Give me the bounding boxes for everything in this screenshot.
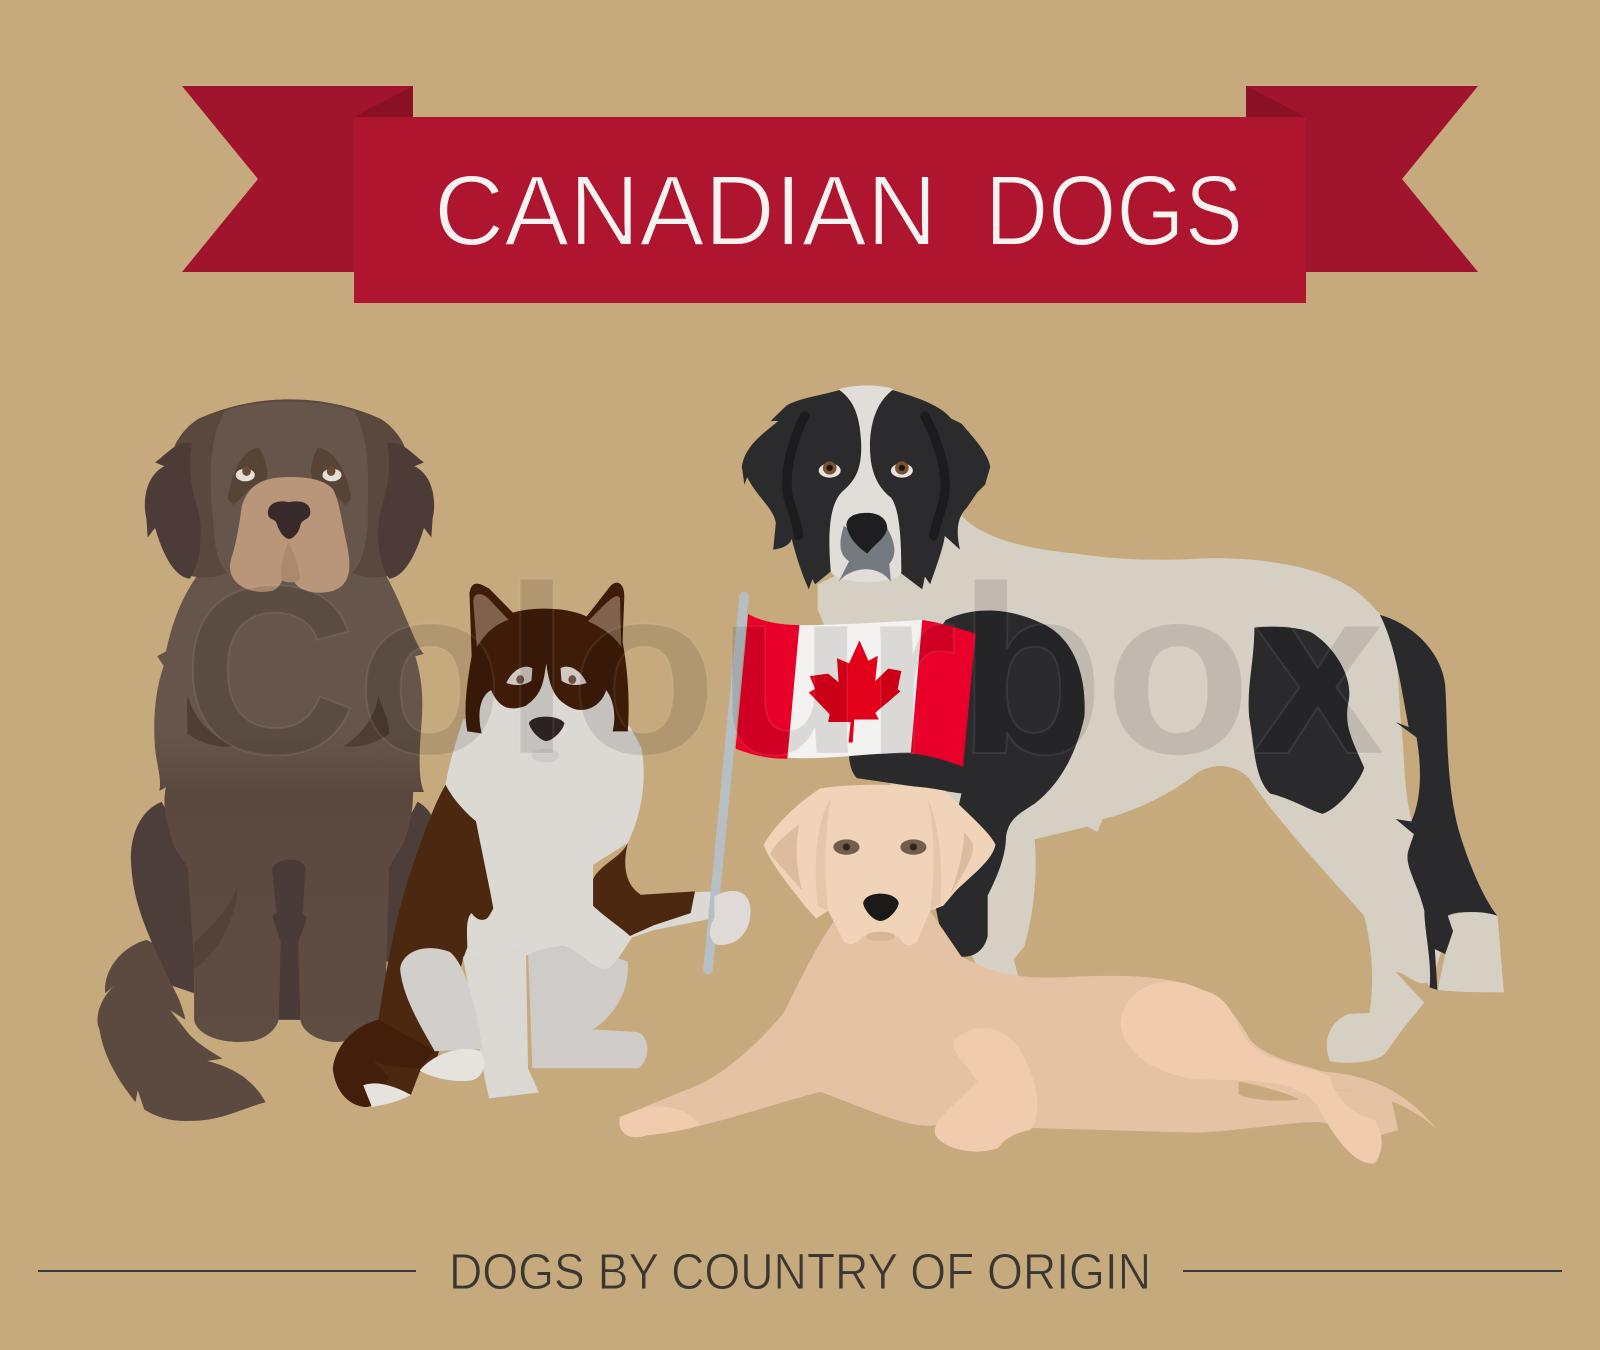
dog: yellow Labrador lying <box>619 785 1437 1164</box>
ribbon banner with title <box>182 86 1478 303</box>
husky head <box>466 583 629 734</box>
dog: Landseer standing <box>742 386 1504 1063</box>
husky brown arm <box>593 843 695 936</box>
husky brown back and tail <box>333 785 493 1107</box>
title: DOGS <box>985 155 1243 267</box>
husky lower body <box>524 946 647 1068</box>
husky paw <box>710 891 751 945</box>
title <box>434 155 1243 267</box>
tail <box>97 940 266 1121</box>
labrador foreleg <box>935 1028 1037 1152</box>
flag pole <box>708 597 744 969</box>
title: CANADIAN <box>434 155 937 267</box>
dog: husky sitting <box>333 583 751 1107</box>
Canadian flag <box>736 614 976 767</box>
tail <box>1322 1072 1437 1130</box>
haunches <box>131 802 194 993</box>
watermark: Colourbox <box>183 536 1385 804</box>
body <box>154 574 424 1042</box>
husky chest <box>446 719 715 991</box>
dog: brown Newfoundland sitting <box>97 399 434 1121</box>
labrador head <box>764 785 995 945</box>
maple leaf <box>809 640 901 742</box>
head <box>172 399 407 577</box>
labrador haunch <box>1121 981 1382 1164</box>
labrador body <box>619 911 1398 1137</box>
footer subtitle with rules: DOGS BY COUNTRY OF ORIGIN <box>449 1243 1151 1300</box>
